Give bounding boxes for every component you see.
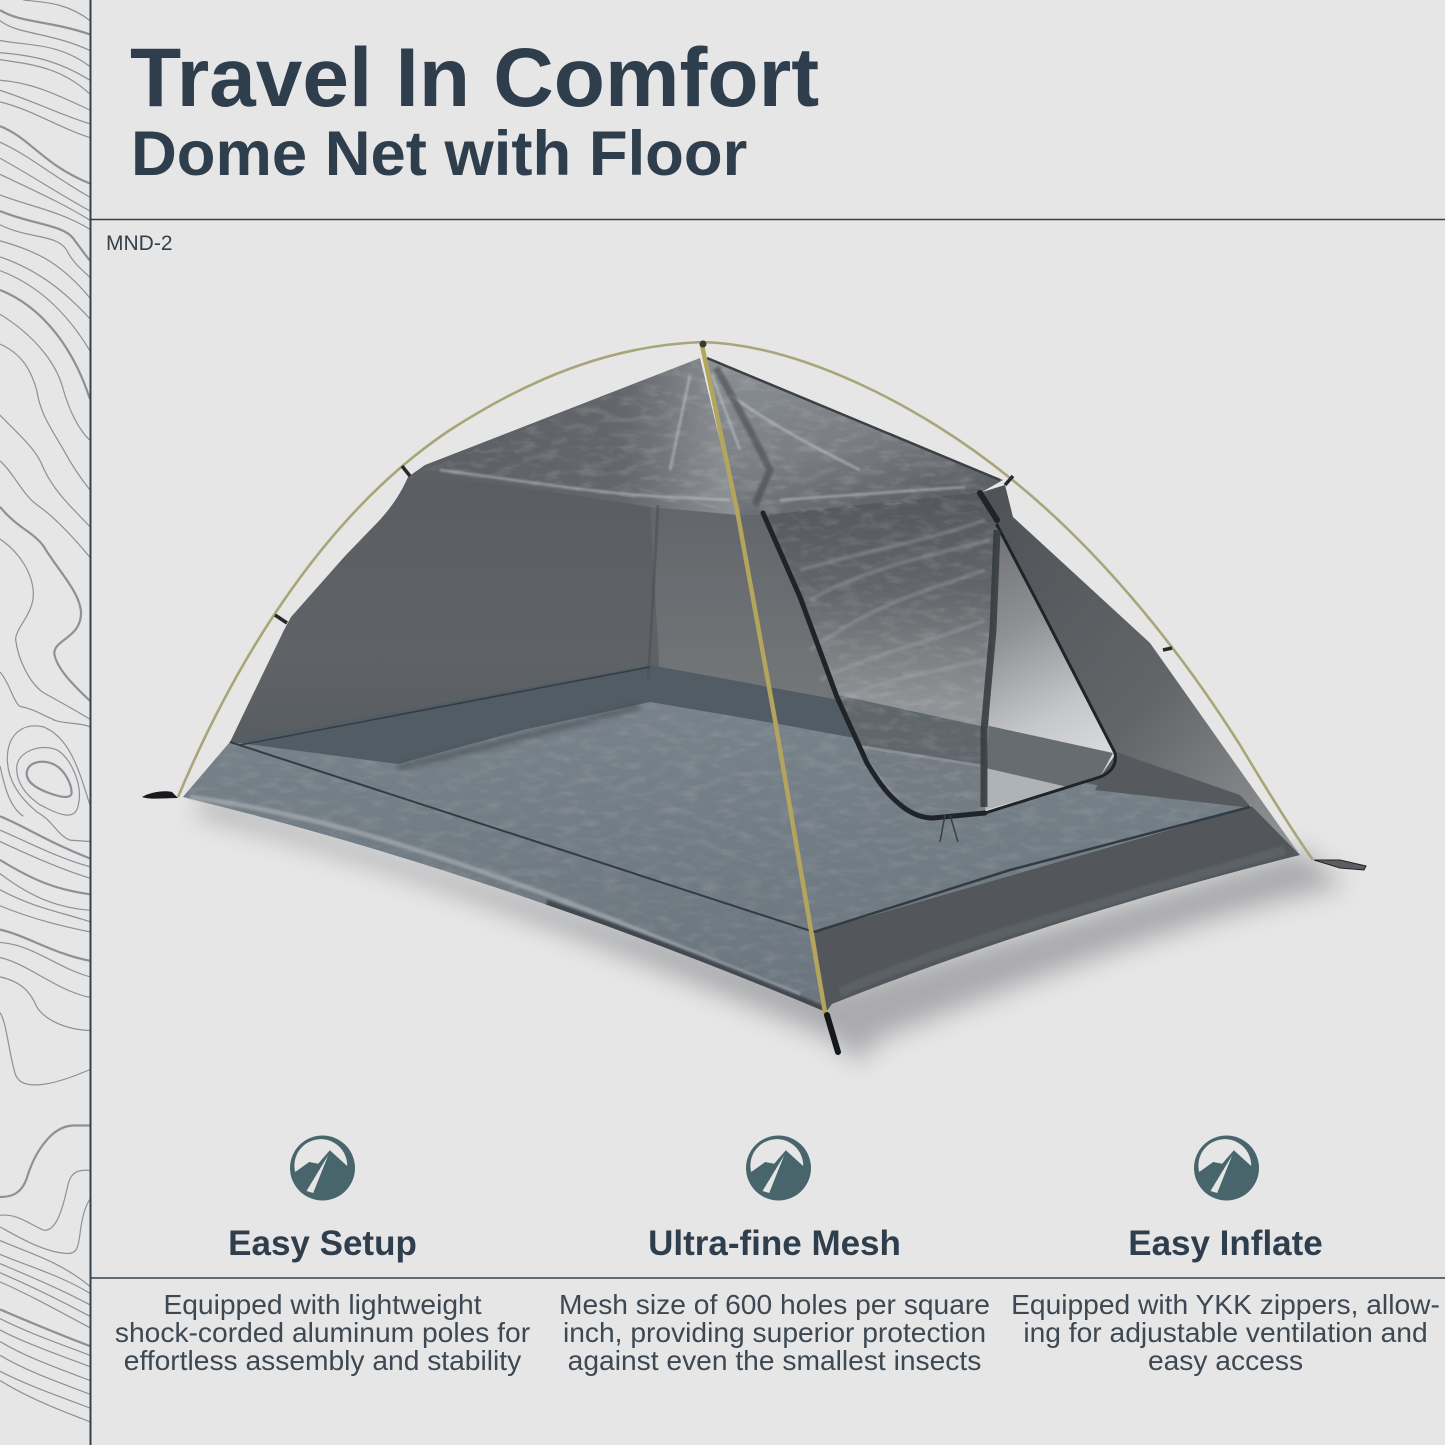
front pole tip xyxy=(827,1015,838,1052)
inner fold shadow xyxy=(398,706,640,768)
door zipper frame xyxy=(763,493,1115,818)
door lower floor tint xyxy=(860,748,985,818)
feature: Ultra-fine Mesh xyxy=(559,1136,990,1376)
description: against even the smallest insects xyxy=(568,1344,981,1376)
ground shadow xyxy=(200,795,1345,1059)
door window light panel xyxy=(985,525,1115,812)
door mesh wrinkle texture xyxy=(767,500,994,812)
description: shock-corded aluminum poles for xyxy=(115,1316,530,1348)
roof right panel xyxy=(705,358,1003,515)
lower window band xyxy=(985,725,1113,787)
pole clips xyxy=(275,466,1172,650)
icon: mountain badge xyxy=(1194,1136,1259,1200)
arch pole xyxy=(178,342,1313,860)
floor seams xyxy=(230,667,1250,932)
subtitle: Dome Net with Floor xyxy=(131,119,747,189)
top hub xyxy=(700,340,706,348)
right wall lower dark band xyxy=(1095,752,1252,808)
description: ing for adjustable ventilation and xyxy=(1023,1316,1428,1348)
door vertical zipper xyxy=(984,530,997,807)
corner back seam xyxy=(648,505,658,680)
description: Mesh size of 600 holes per square xyxy=(559,1288,990,1320)
description: Equipped with lightweight xyxy=(163,1288,482,1320)
heading: Easy Setup xyxy=(228,1224,417,1263)
roof dark fold xyxy=(716,368,770,505)
roof seam highlights xyxy=(440,375,965,500)
door mesh wrinkles xyxy=(800,520,990,700)
model number: MND-2 xyxy=(106,232,172,255)
description xyxy=(559,1288,990,1376)
icon: mountain badge xyxy=(290,1136,355,1200)
description: effortless assembly and stability xyxy=(124,1344,522,1376)
roof left panel xyxy=(408,358,738,515)
description: easy access xyxy=(1148,1344,1303,1376)
heading: Easy Inflate xyxy=(1128,1224,1323,1263)
back wall mesh xyxy=(650,500,860,730)
right corner peg xyxy=(1314,860,1366,870)
back bathtub band xyxy=(232,665,1240,795)
description: Equipped with YKK zippers, allow- xyxy=(1011,1288,1440,1320)
icon: mountain badge xyxy=(746,1136,811,1200)
tent photo illustration xyxy=(142,340,1366,1059)
left corner peg xyxy=(142,791,178,799)
roof right edge xyxy=(707,358,1000,480)
left wall mesh xyxy=(183,477,660,797)
roof wrinkle texture xyxy=(430,368,992,514)
topographic contour strip xyxy=(0,0,90,1422)
feature: Easy Inflate xyxy=(1011,1136,1440,1376)
description xyxy=(1011,1288,1440,1376)
right wall mesh xyxy=(982,485,1300,855)
door pull cords xyxy=(940,815,958,842)
lower window light xyxy=(985,768,1067,810)
title: Travel In Comfort xyxy=(130,30,819,124)
floor interior xyxy=(183,700,1252,1012)
front-left hem shadow xyxy=(545,899,822,1010)
door mesh xyxy=(763,492,997,818)
front-right band xyxy=(814,806,1300,1012)
door band xyxy=(838,695,985,765)
description: inch, providing superior protection xyxy=(563,1316,986,1348)
heading: Ultra-fine Mesh xyxy=(648,1224,901,1263)
feature: Easy Setup xyxy=(115,1136,530,1376)
description xyxy=(115,1288,530,1376)
front-right hem xyxy=(840,850,1285,992)
front-left hem highlight xyxy=(190,797,800,995)
front pole xyxy=(702,345,826,1018)
floor wrinkle texture xyxy=(189,715,1217,988)
